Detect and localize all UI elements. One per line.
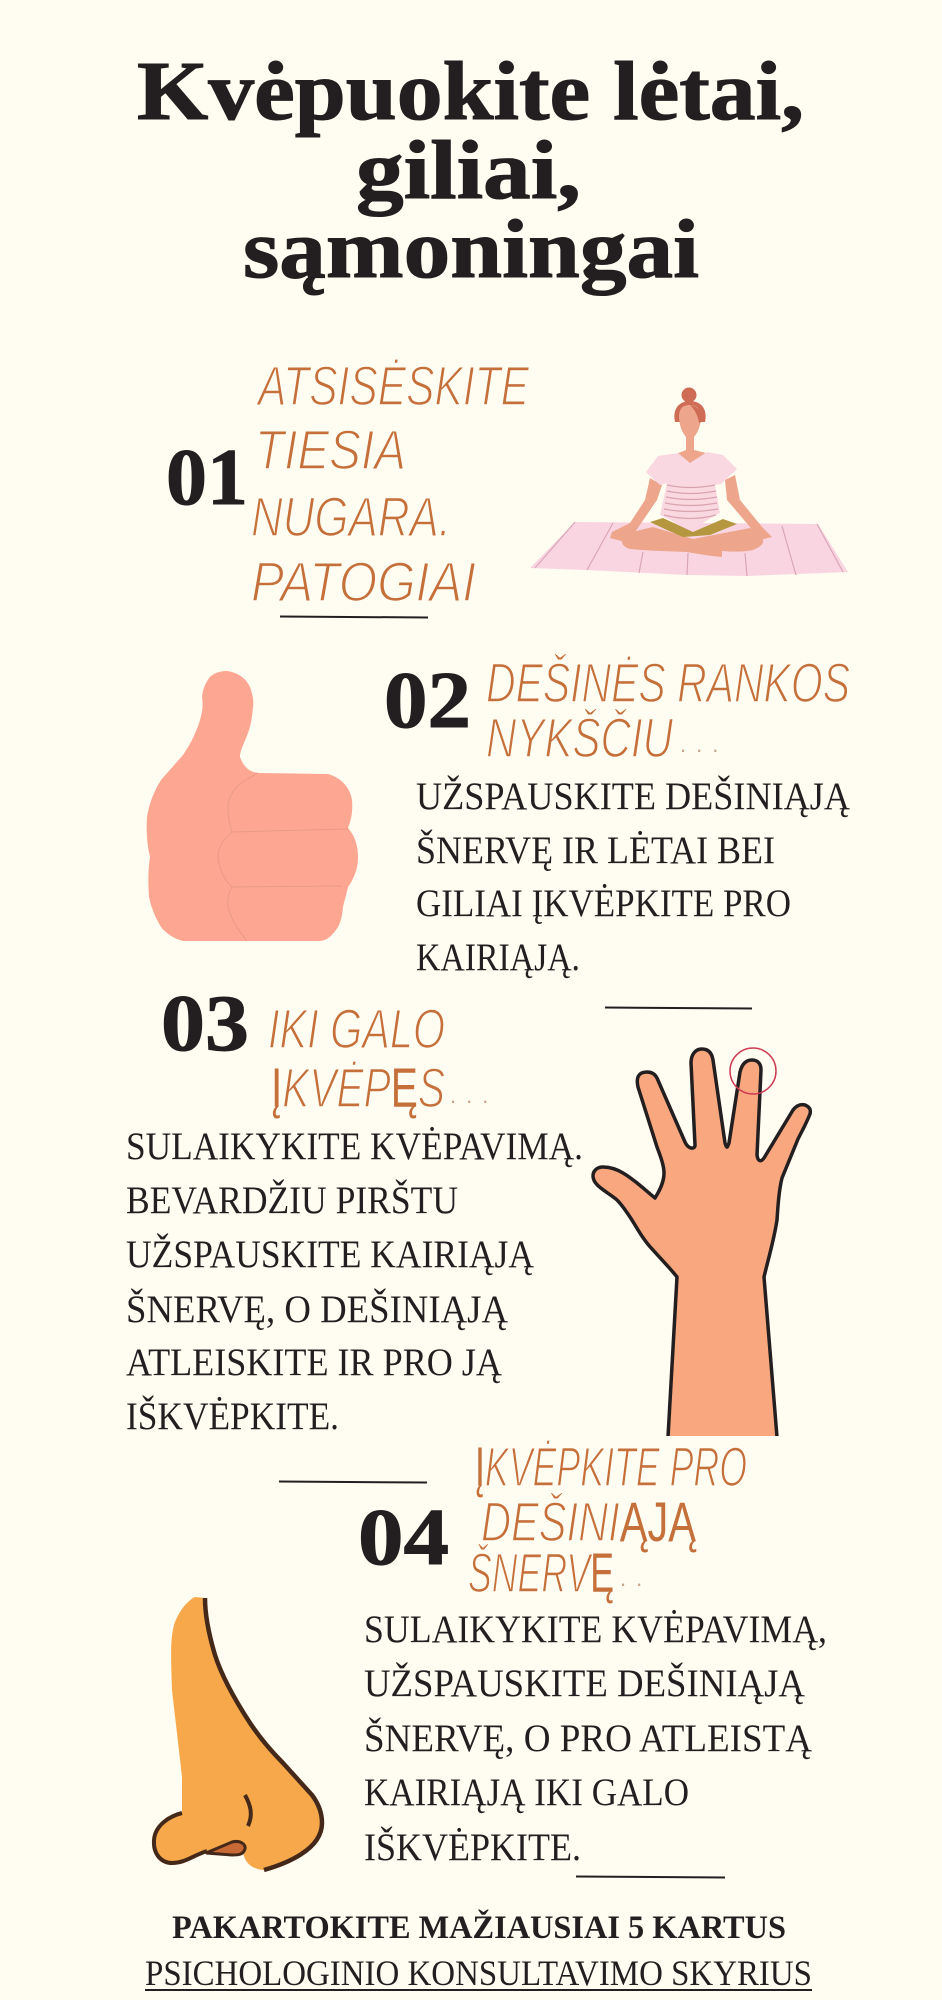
handwritten heading 02	[486, 651, 850, 769]
body text 03: IŠKVĖPKITE.	[126, 1394, 339, 1438]
icon: open hand with ringed finger	[593, 1048, 810, 1442]
body text 04: KAIRIĄJĄ IKI GALO	[364, 1771, 689, 1814]
body text 03: UŽSPAUSKITE KAIRIĄJĄ	[126, 1232, 534, 1276]
body text 03: ATLEISKITE IR PRO JĄ	[126, 1341, 502, 1384]
body text 04: IŠKVĖPKITE.	[364, 1825, 581, 1869]
body text 03	[126, 1125, 583, 1438]
divider 03	[279, 1482, 427, 1483]
title	[137, 45, 804, 296]
body text 02: UŽSPAUSKITE DEŠINIĄJĄ	[416, 774, 850, 818]
body text 04: SULAIKYKITE KVĖPAVIMĄ,	[364, 1608, 827, 1651]
number 03: 03	[161, 980, 249, 1068]
body text 02: KAIRIĄJĄ.	[416, 936, 580, 979]
handwritten heading 03: IKI GALO	[268, 997, 445, 1060]
handwritten heading 04	[468, 1435, 747, 1604]
divider 02	[605, 1008, 752, 1009]
handwritten heading 01: TIESIA	[255, 418, 406, 481]
body text 04	[364, 1608, 827, 1869]
footer: repeat note: PAKARTOKITE MAŽIAUSIAI 5 KARTUS	[172, 1908, 786, 1946]
body text 03: SULAIKYKITE KVĖPAVIMĄ.	[126, 1125, 583, 1168]
icon: thumbs up	[147, 671, 358, 941]
footer: department name: PSICHOLOGINIO KONSULTAVIMO SKYRIUS	[145, 1953, 812, 1993]
handwritten heading 04: ŠNERVĘ	[468, 1541, 614, 1604]
trailing dots 02: ...	[680, 732, 728, 757]
handwritten heading 01	[251, 354, 529, 613]
handwritten heading 01: PATOGIAI	[251, 550, 476, 613]
handwritten heading 01: ATSISĖSKITE	[256, 354, 529, 417]
handwritten heading 04: DEŠINIĄJĄ	[481, 1490, 696, 1553]
number 04: 04	[358, 1494, 449, 1582]
divider 01	[280, 616, 428, 618]
title: Kvėpuokite lėtai,	[137, 45, 804, 138]
panel: step 02	[147, 651, 850, 1008]
body text 02	[416, 774, 850, 979]
number 01: 01	[166, 434, 248, 522]
panel: step 03	[126, 980, 810, 1482]
body text 03: ŠNERVĘ, O DEŠINIĄJĄ	[126, 1287, 508, 1331]
body text 03: BEVARDŽIU PIRŠTU	[126, 1178, 458, 1222]
icon: nose in profile	[154, 1597, 322, 1870]
handwritten heading 04: ĮKVĖPKITE PRO	[475, 1435, 747, 1498]
icon: woman meditating on a mat	[530, 388, 848, 576]
handwritten heading 03	[268, 997, 445, 1119]
title: giliai,	[356, 124, 581, 217]
body text 04: UŽSPAUSKITE DEŠINIĄJĄ	[364, 1661, 805, 1705]
body text 02: GILIAI ĮKVĖPKITE PRO	[416, 882, 791, 925]
panel: step 01	[166, 354, 848, 618]
handwritten heading 03: ĮKVĖPĘS	[271, 1056, 445, 1119]
trailing dots 04: ..	[620, 1566, 652, 1591]
number 02: 02	[384, 657, 471, 745]
title: sąmoningai	[243, 203, 699, 296]
body text 04: ŠNERVĘ, O PRO ATLEISTĄ	[364, 1716, 812, 1760]
handwritten heading 01: NUGARA.	[251, 485, 451, 548]
divider 04	[576, 1876, 725, 1878]
trailing dots 03: ...	[450, 1083, 498, 1108]
body text 02: ŠNERVĘ IR LĖTAI BEI	[416, 828, 775, 872]
handwritten heading 02: NYKŠČIU	[486, 706, 673, 769]
panel: step 04	[154, 1435, 827, 1878]
